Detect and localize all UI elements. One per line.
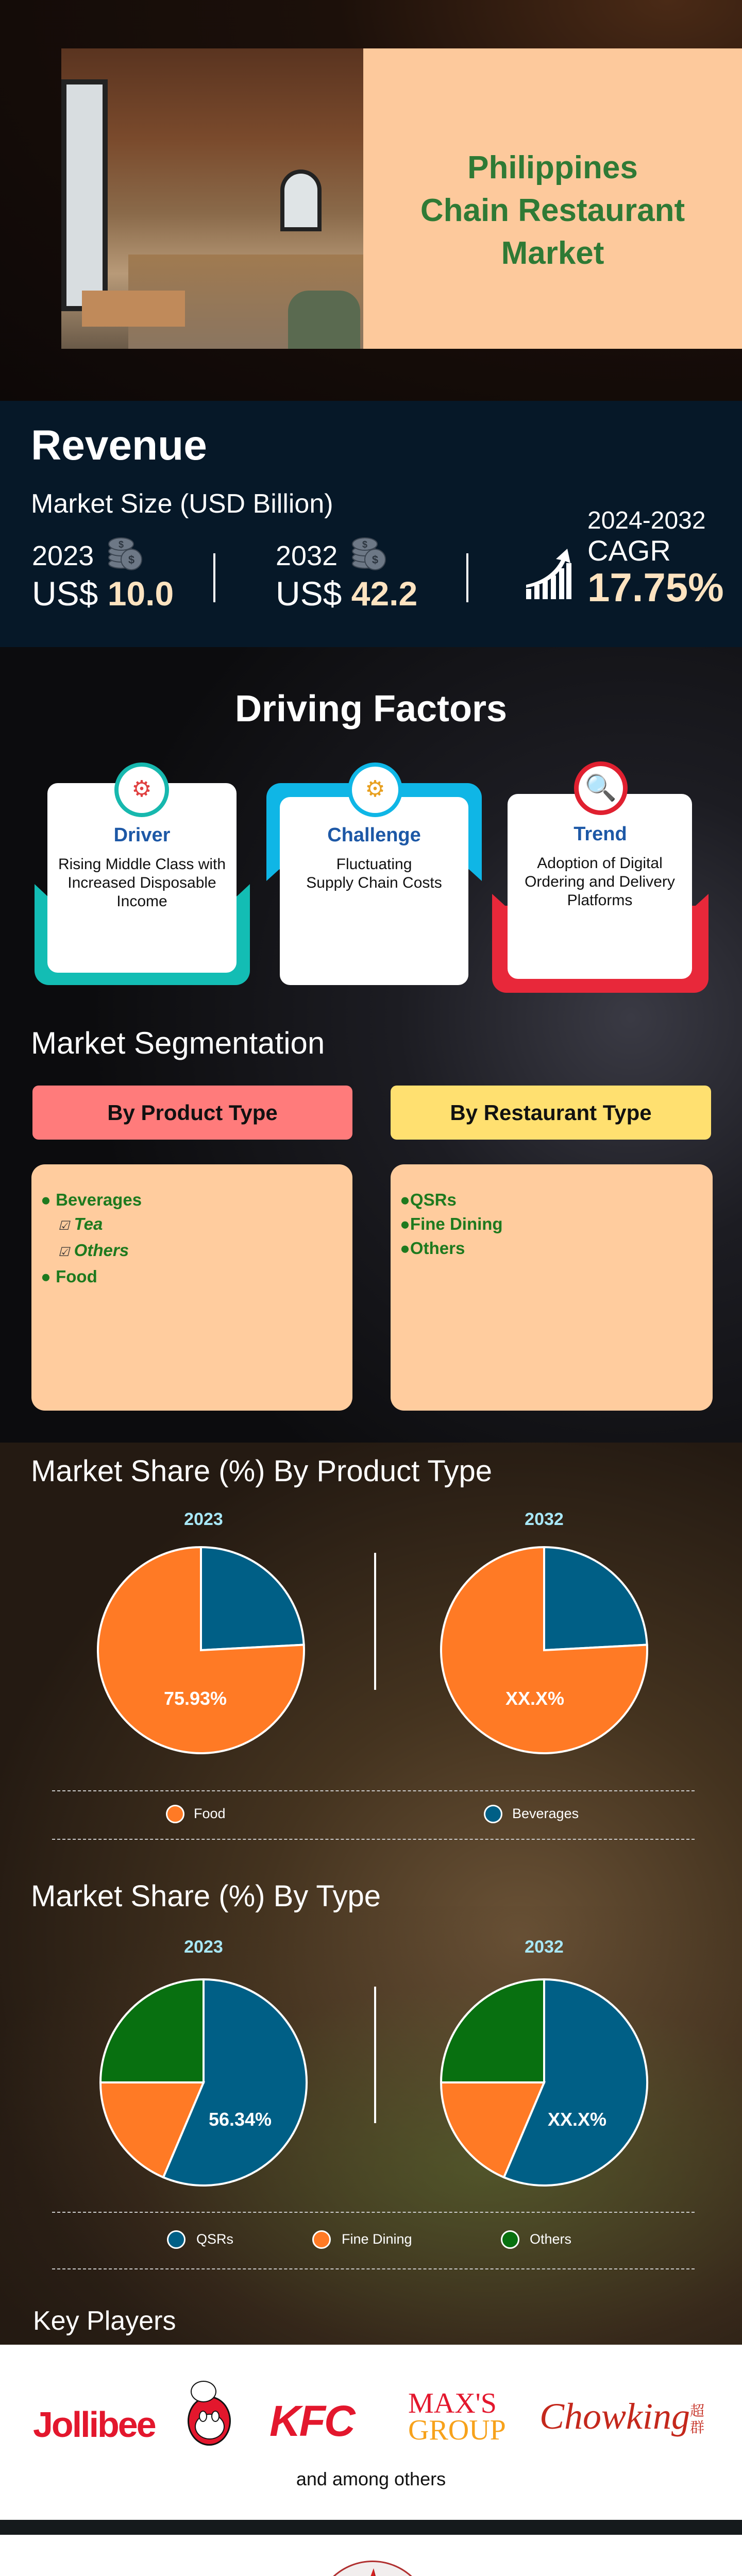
chart: product type pies: XX.X%	[505, 1688, 564, 1709]
chart: type pies: 2023	[184, 1937, 223, 1957]
title: Driver: Driver	[114, 824, 170, 846]
panel: restaurant type list: ●Fine Dining	[400, 1214, 503, 1233]
panel: restaurant type list	[391, 1164, 713, 1411]
icon: coins: $	[372, 553, 378, 566]
CAGR block: CAGR	[587, 534, 671, 567]
chart: type pies: XX.X%	[548, 2109, 606, 2130]
logo: Chowking: Chowking	[539, 2396, 690, 2437]
icon: trend: 🔍	[585, 773, 617, 802]
header: By Restaurant Type	[391, 1086, 711, 1140]
stat 2032	[276, 537, 417, 613]
heading: Driving Factors: Driving Factors	[235, 688, 507, 730]
CAGR block: 2024-2032	[587, 507, 706, 534]
logo: Jollibee	[33, 2381, 231, 2446]
logo: Chowking: 超群	[690, 2403, 704, 2436]
background: food photo	[0, 1443, 742, 2345]
text: challenge description	[306, 856, 442, 891]
stat 2032: 2032	[276, 540, 338, 571]
title panel	[363, 48, 742, 349]
divider	[213, 553, 215, 602]
legend: product type: Beverages	[512, 1806, 579, 1821]
text: and among others: and among others	[296, 2468, 446, 2489]
chart: type pies: 56.34%	[209, 2109, 272, 2130]
title: Challenge: Challenge	[327, 824, 421, 846]
icon: coins: $	[362, 539, 367, 550]
chart: product type pies	[97, 1510, 648, 1754]
heading: Market Share By Type: Market Share (%) By Type	[31, 1879, 381, 1913]
logo: Max's Group	[408, 2387, 506, 2446]
text: trend description: Adoption of Digital Ordering and Delivery Platforms	[525, 855, 675, 909]
heading: Key Players: Key Players	[33, 2306, 176, 2336]
stat 2023: US$ 10.0	[32, 574, 174, 613]
chart: product type pies: 2032	[525, 1510, 564, 1529]
background: middle dark bokeh	[0, 647, 742, 1471]
footer	[0, 2535, 742, 2576]
legend: type: Fine Dining	[342, 2231, 412, 2247]
card: Challenge	[266, 762, 482, 985]
heading: Revenue: Revenue	[31, 422, 207, 469]
logo: KFC: KFC	[269, 2397, 354, 2445]
legend: product type: Food	[194, 1806, 226, 1821]
header: By Restaurant Type: By Restaurant Type	[450, 1100, 652, 1125]
logo: Max's Group: GROUP	[408, 2414, 506, 2446]
heading: Market Segmentation: Market Segmentation	[31, 1026, 325, 1060]
stat 2023: 2023	[32, 540, 94, 571]
stat 2032: US$ 42.2	[276, 574, 417, 613]
icon: coins	[108, 537, 142, 570]
icon: driver	[114, 762, 169, 817]
legend: type	[167, 2230, 571, 2249]
icon: coins: $	[128, 553, 134, 566]
CAGR block: 17.75%	[587, 565, 724, 610]
legend: type: QSRs	[196, 2231, 233, 2247]
chart: type pies: 2032	[525, 1937, 564, 1957]
chart: type pies	[99, 1937, 648, 2187]
card: Trend	[492, 761, 709, 993]
icon: driver: ⚙	[131, 776, 152, 802]
title panel: Market	[501, 235, 604, 271]
chart: product type pies: 2023	[184, 1510, 223, 1529]
heading: Market Share By Product Type: Market Share (%) By Product Type	[31, 1454, 492, 1488]
panel: key players logos	[0, 2345, 742, 2520]
background: top dark	[0, 0, 742, 401]
chart: product type pies: 75.93%	[164, 1688, 227, 1709]
panel: restaurant type list: ●Others	[400, 1239, 465, 1258]
CAGR block	[587, 507, 724, 610]
panel: product type list: ☑ Others	[58, 1241, 129, 1260]
card: Driver	[35, 762, 250, 985]
title panel: Chain Restaurant	[420, 193, 685, 228]
icon: challenge: ⚙	[365, 776, 385, 802]
icon: trend	[574, 761, 628, 815]
header: By Product Type: By Product Type	[107, 1100, 278, 1125]
title: Trend: Trend	[574, 823, 627, 845]
revenue band	[0, 401, 742, 647]
panel: product type list	[31, 1164, 352, 1411]
panel: restaurant type list: ●QSRs	[400, 1190, 457, 1209]
logo: Astute Analytica	[333, 2561, 412, 2576]
legend: product type	[166, 1805, 579, 1823]
icon: coins	[352, 537, 386, 570]
subheading: market size: Market Size (USD Billion)	[31, 489, 333, 519]
header: By Product Type	[32, 1086, 352, 1140]
title panel: Philippines	[467, 150, 638, 185]
legend: type: Others	[530, 2231, 571, 2247]
stat 2023	[32, 537, 174, 613]
logo: Max's Group: MAX'S	[408, 2387, 497, 2419]
text: driver description: Rising Middle Class with Increased Disposable Income	[58, 856, 226, 910]
header image: restaurant interior	[61, 48, 363, 349]
text: challenge description: Supply Chain Costs	[306, 874, 442, 891]
panel: product type list: ● Food	[41, 1267, 97, 1286]
text: challenge description: Fluctuating	[336, 856, 412, 873]
icon: coins: $	[119, 539, 124, 550]
icon: growth chart	[526, 549, 571, 599]
icon: challenge	[348, 762, 402, 817]
divider	[466, 553, 468, 602]
logo: Jollibee: Jollibee	[33, 2404, 155, 2445]
panel: product type list: ● Beverages	[41, 1190, 142, 1209]
panel: product type list: ☑ Tea	[58, 1214, 103, 1233]
